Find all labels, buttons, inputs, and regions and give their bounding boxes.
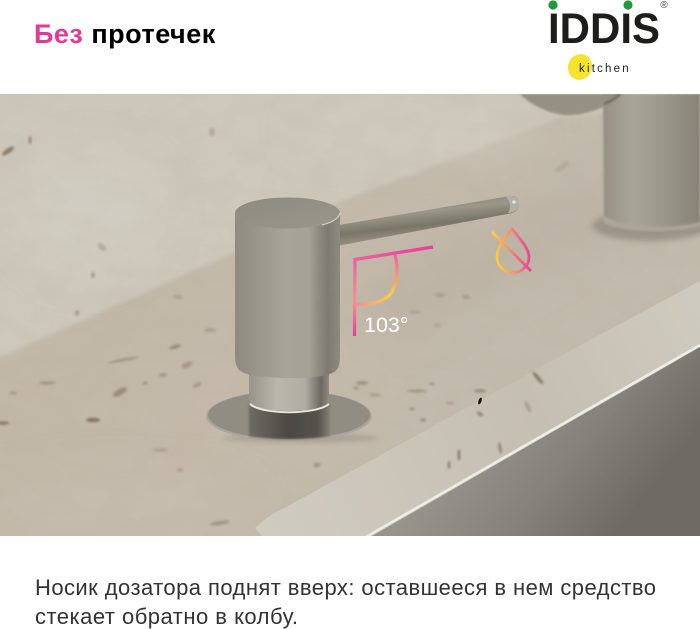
heading: Без протечек [34,19,216,49]
soft light on wall and deck [0,108,640,535]
dispenser neck [249,372,329,411]
stone texture [0,94,700,536]
logo: IDDIS kitchen: ® [660,0,668,11]
stone pits [0,128,570,526]
angle value: 103° [364,313,408,337]
logo: IDDIS kitchen [548,0,668,83]
description text: стекает обратно в колбу. [35,604,298,629]
cap rim highlight [322,213,340,225]
background faucet [520,94,700,241]
103 degree angle icon [354,247,433,336]
stone wall [0,94,700,536]
photo: soap dispenser on stone sink [0,94,700,560]
dispenser top cap [235,198,340,228]
stone deck [0,100,700,560]
logo: IDDIS kitchen: IDDIS [548,5,660,53]
logo: IDDIS kitchen: kitchen [579,63,631,75]
dispenser shadow [222,433,378,443]
sink basin [372,347,700,536]
sink rim highlight [366,345,700,537]
brushed metal texture [338,362,340,368]
description text: Носик дозатора поднят вверх: оставшееся в нем средство [35,575,656,600]
front edge of the counter [255,281,700,536]
spout [333,196,519,246]
black pit [478,398,482,404]
dispenser body [235,213,340,378]
neck chrome ring [250,404,329,412]
description text [35,575,656,629]
dispenser base plate [206,390,372,442]
no-drip drop icon [492,229,531,272]
